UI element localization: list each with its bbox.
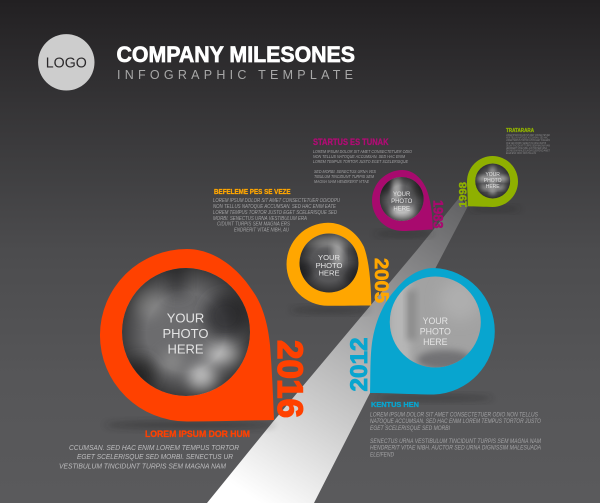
heading: Startus es tunak: STARTUS ES TUNAK (313, 137, 389, 148)
text block: Kentus hen: EGET SCELERISQUE SED MORBI (370, 425, 450, 432)
photo placeholder: HERE (486, 184, 500, 190)
milestone 1983 pin (372, 170, 434, 237)
photo placeholder: PHOTO (391, 199, 413, 205)
photo placeholder: HERE (423, 337, 448, 347)
text block: Befeleme pes se veze: MORBI. SENECTUS URNA VESTIBULUM ERA (213, 216, 307, 222)
text block: Startus es tunak: LOREM IPSUM DOLOR SIT AMET CONSECTETUER ODIO (313, 149, 412, 154)
logo (38, 34, 94, 90)
text block: Kentus hen: HENDRERIT VITAE NIBH. AUCTOR SED URNA DIGNISSIM MALESUADA (370, 444, 541, 452)
text block: Kentus hen: NATOQUE ACCUMSAN. SED HAC ENIM LOREM TEMPUS TORTOR JUSTO (370, 418, 541, 425)
photo placeholder: PHOTO (484, 178, 502, 184)
year 2005: 2005 (370, 258, 391, 303)
photo placeholder (300, 234, 358, 292)
text block: Startus es tunak: LOREM TEMPUS TORTOR JUSTO EGET SCELERISQUE (313, 159, 409, 164)
text block: Tratarara: HENDRERIT VITAE NIBH. AUCTOR SED URNA (506, 146, 547, 150)
text block: Tratarara: LOREM TEMPUS TORTOR JUSTO EGET SCELERIS (506, 138, 550, 142)
photo placeholder: HERE (167, 342, 204, 356)
photo placeholder (122, 262, 250, 396)
photo placeholder (390, 276, 481, 368)
heading: Tratarara: TRATARARA (506, 128, 534, 134)
text block: Tratarara: LOREM IPSUM DOLOR SIT AMET CONSECTETUER (506, 133, 550, 137)
photo placeholder: YOUR (485, 172, 500, 178)
milestone 1998 pin (467, 156, 521, 212)
text block: Startus es tunak: MAGNA NAM HENDRERIT VITAE (314, 179, 370, 184)
photo placeholder: YOUR (423, 316, 448, 326)
text block: Lorem ipsum dor hum: EGET SCELERISQUE SED MORBI. SENECTUS UR (77, 452, 233, 461)
text block: Kentus hen: SENECTUS URNA VESTIBULUM TINCIDUNT TURPIS SEM MAGNA NAM (370, 438, 542, 445)
text block: Startus es tunak: SED MORBI. SENECTUS URNA VES (314, 169, 377, 174)
heading: Lorem ipsum dor hum: LOREM IPSUM DOR HUM (145, 428, 250, 439)
photo placeholder: PHOTO (316, 261, 343, 270)
text block: Befeleme pes se veze (213, 198, 341, 234)
text block: Tratarara: ULUM TINCIDUNT TURPIS SEM MAGNA NAM (506, 143, 550, 147)
light road (207, 198, 468, 503)
year 1998: 1998 (458, 182, 470, 208)
title: COMPANY MILESONES (116, 42, 355, 67)
text block: Kentus hen: LOREM IPSUM DOLOR SIT AMET CONSECTETUER ODIO NON TELLUS (370, 412, 539, 418)
photo placeholder: YOUR (393, 192, 411, 198)
text block: Kentus hen (370, 412, 542, 458)
text block: Lorem ipsum dor hum: VESTIBULUM TINCIDUNT TURPIS SEM MAGNA NAM (59, 462, 226, 470)
text block: Startus es tunak: TIBULUM TINCIDUNT TURPIS SEM (314, 174, 374, 179)
year 2012: 2012 (346, 337, 373, 392)
text block: Befeleme pes se veze: LOREM TEMPUS TORTOR JUSTO EGET SCELERISQUE SED (213, 210, 337, 216)
photo placeholder: HERE (318, 268, 340, 278)
text block: Kentus hen: ELEIFEND (370, 452, 394, 458)
heading: Kentus hen: KENTUS HEN (371, 400, 419, 409)
milestone 2005 pin (287, 223, 371, 314)
text block: Tratarara: DIGNISSIM MALESUADA ELEIFEND AMET (506, 149, 550, 153)
text block: Befeleme pes se veze: CIDUNT TURPIS SEM MAGNA ERS (217, 222, 290, 228)
text block: Befeleme pes se veze: ENDRERIT VITAE NIBH, AU (234, 228, 290, 234)
milestone 2012 pin (370, 268, 495, 402)
text block: Tratarara: NON TELLUS NATOQUE ACCUMSAN. SED HAC (506, 136, 548, 140)
text block: Befeleme pes se veze: NON TELLUS NATOQUE ACCUMSAN. SED HAC ENIM EATE (213, 204, 336, 210)
photo placeholder: PHOTO (162, 326, 208, 341)
text block: Lorem ipsum dor hum: CCUMSAN. SED HAC ENIM LOREM TEMPUS TORTOR (69, 443, 239, 452)
heading: Befeleme pes se veze: BEFELEME PES SE VEZE (214, 187, 290, 196)
photo placeholder (475, 164, 510, 198)
year 2016: 2016 (270, 340, 309, 418)
logo: LOGO (46, 54, 87, 72)
text block: Tratarara: QUE SED MORBI. SENECTUS URNA VESTIB (506, 141, 546, 145)
text block: Startus es tunak (313, 149, 412, 184)
photo placeholder: YOUR (318, 253, 340, 262)
photo placeholder: YOUR (167, 310, 204, 326)
text block: Lorem ipsum dor hum (59, 443, 239, 470)
text block: Tratarara: ELEIFEND ODIO NON TELLUS (506, 151, 536, 155)
photo placeholder: PHOTO (420, 326, 451, 336)
text block: Startus es tunak: NON TELLUS NATOQUE ACCUMSAN. SED HAC ENIM (313, 154, 405, 159)
milestone 2016 pin (100, 249, 275, 430)
year 1983: 1983 (430, 200, 446, 229)
text block: Tratarara (506, 133, 550, 155)
text block: Befeleme pes se veze: LOREM IPSUM DOLOR SIT AMET CONSECTETUER ODIODPU (213, 198, 341, 204)
title (116, 42, 355, 82)
photo placeholder (380, 177, 424, 221)
title: INFOGRAPHIC TEMPLATE (117, 68, 353, 82)
photo placeholder: HERE (393, 206, 410, 212)
